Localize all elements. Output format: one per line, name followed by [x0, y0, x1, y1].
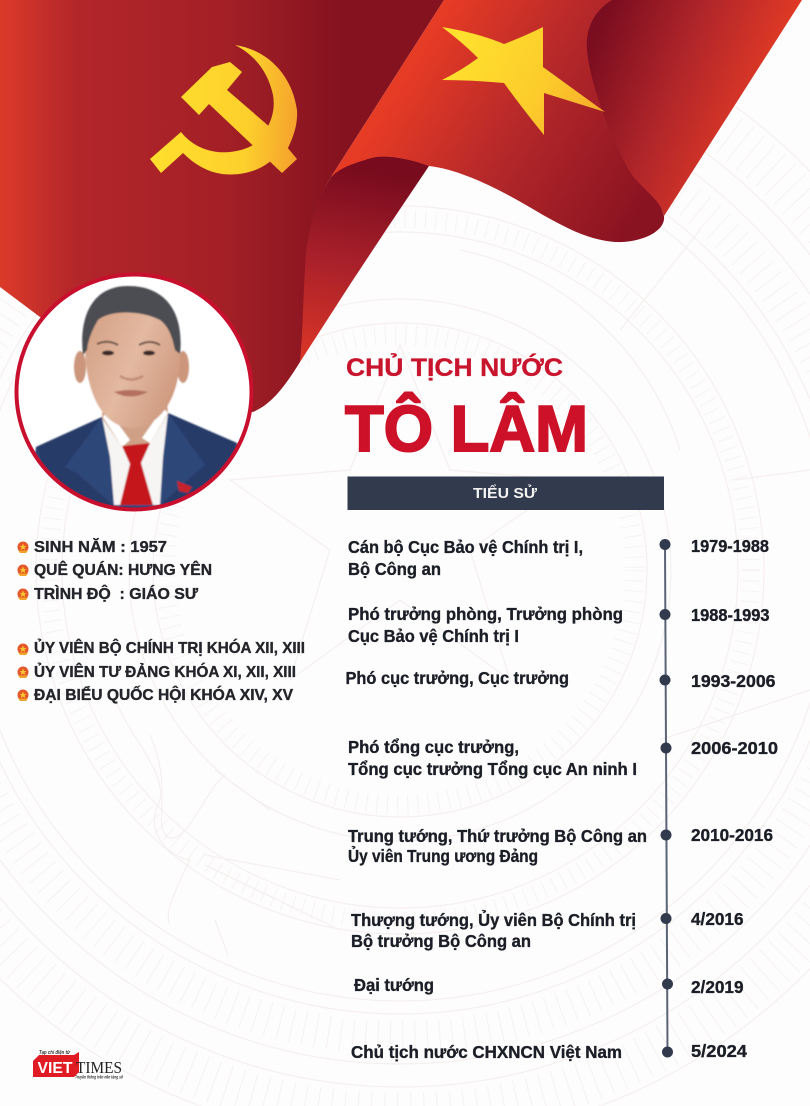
info: birth year: SINH NĂM : 1957	[34, 537, 167, 556]
timeline entry: 2010-2016: 2010-2016	[691, 825, 773, 845]
portrait: ears	[74, 351, 86, 383]
timeline entry: 2/2019	[354, 975, 744, 997]
logo: VietTimes: TIMES	[76, 1058, 122, 1077]
timeline entry: 2/2019: Đại tướng	[354, 975, 434, 995]
timeline entry: 4/2016	[351, 909, 744, 951]
timeline entry: 2/2019: 2/2019	[691, 977, 744, 997]
timeline entry: 2006-2010	[348, 737, 778, 779]
portrait: lapel badge	[177, 481, 192, 493]
timeline entry: 1979-1988: Cán bộ Cục Bảo vệ Chính trị I,	[348, 537, 583, 557]
timeline entry: 4/2016: Thượng tướng, Ủy viên Bộ Chính trị	[351, 910, 636, 930]
flag: left panel	[0, 0, 444, 412]
biography info list	[18, 537, 305, 704]
logo: VietTimes: VIET	[38, 1060, 73, 1077]
title: Chủ tịch nước: CHỦ TỊCH NƯỚC	[346, 352, 563, 382]
timeline entry: 1979-1988: Bộ Công an	[348, 559, 441, 579]
timeline: vertical line	[665, 545, 668, 1052]
portrait photo in red ring	[16, 274, 252, 515]
flag: red party and national flag ribbon	[0, 0, 802, 412]
portrait: suit	[34, 412, 238, 508]
heading bar: Tiểu sử	[348, 476, 664, 510]
flag: back fold, right	[587, 0, 802, 216]
timeline entry: 2010-2016	[348, 825, 773, 866]
info: hometown: QUÊ QUÁN: HƯNG YÊN	[34, 560, 212, 579]
flag: middle panel	[331, 0, 664, 242]
timeline entry: 2010-2016: Trung tướng, Thứ trưởng Bộ Công an	[348, 826, 647, 846]
icon: hammer and sickle	[150, 45, 297, 174]
heading bar: Tiểu sử: TIỂU SỬ	[473, 484, 538, 502]
timeline entry: 4/2016: Bộ trưởng Bộ Công an	[351, 931, 531, 951]
timeline entry: 1993-2006: Phó cục trưởng, Cục trưởng	[346, 668, 569, 688]
flag: underside fold	[300, 156, 429, 362]
info: national assembly: ĐẠI BIỂU QUỐC HỘI KHÓA XIV, XV	[34, 684, 294, 704]
timeline entry: 5/2024: 5/2024	[691, 1041, 747, 1061]
timeline entry: 2010-2016: Ủy viên Trung ương Đảng	[348, 846, 538, 866]
timeline entry: 1988-1993: Phó trưởng phòng, Trưởng phòng	[348, 604, 623, 624]
info: politburo: ỦY VIÊN BỘ CHÍNH TRỊ KHÓA XII, XIII	[34, 638, 305, 657]
portrait: tie	[120, 443, 153, 505]
portrait: brows, eyes and mouth	[97, 342, 160, 345]
icon: gold star	[442, 27, 605, 135]
portrait: shirt	[102, 413, 168, 505]
timeline entry: 1988-1993	[348, 604, 770, 646]
timeline entry: 1993-2006	[346, 668, 776, 691]
timeline entry: 2006-2010: Phó tổng cục trưởng,	[348, 737, 519, 757]
timeline entry: 2006-2010: Tổng cục trưởng Tổng cục An ninh I	[348, 759, 637, 779]
timeline entry: 1993-2006: 1993-2006	[691, 671, 776, 691]
info: central committee: ỦY VIÊN TƯ ĐẢNG KHÓA XI, XII, XIII	[34, 662, 296, 681]
info: education: TRÌNH ĐỘ : GIÁO SƯ	[34, 584, 198, 603]
timeline entry: 1979-1988	[348, 536, 769, 579]
portrait: hair	[82, 286, 181, 355]
portrait: face	[85, 310, 180, 428]
timeline entry: 1988-1993: Cục Bảo vệ Chính trị I	[348, 626, 519, 646]
timeline entry: 5/2024	[351, 1041, 747, 1062]
timeline entry: 1988-1993: 1988-1993	[691, 605, 770, 625]
title: Tô Lâm: TÔ LÂM	[345, 392, 588, 465]
timeline entry: 2006-2010: 2006-2010	[691, 738, 778, 758]
timeline	[346, 536, 778, 1062]
logo: VietTimes: Truyền thông trên nền tảng số	[75, 1074, 123, 1080]
timeline entry: 1979-1988: 1979-1988	[691, 536, 769, 556]
timeline entry: 4/2016: 4/2016	[691, 909, 744, 929]
timeline entry: 5/2024: Chủ tịch nước CHXNCN Việt Nam	[351, 1042, 622, 1062]
portrait: neck	[102, 400, 168, 447]
logo: VietTimes	[33, 1050, 123, 1080]
logo: VietTimes: Tạp chí điện tử	[39, 1050, 71, 1056]
